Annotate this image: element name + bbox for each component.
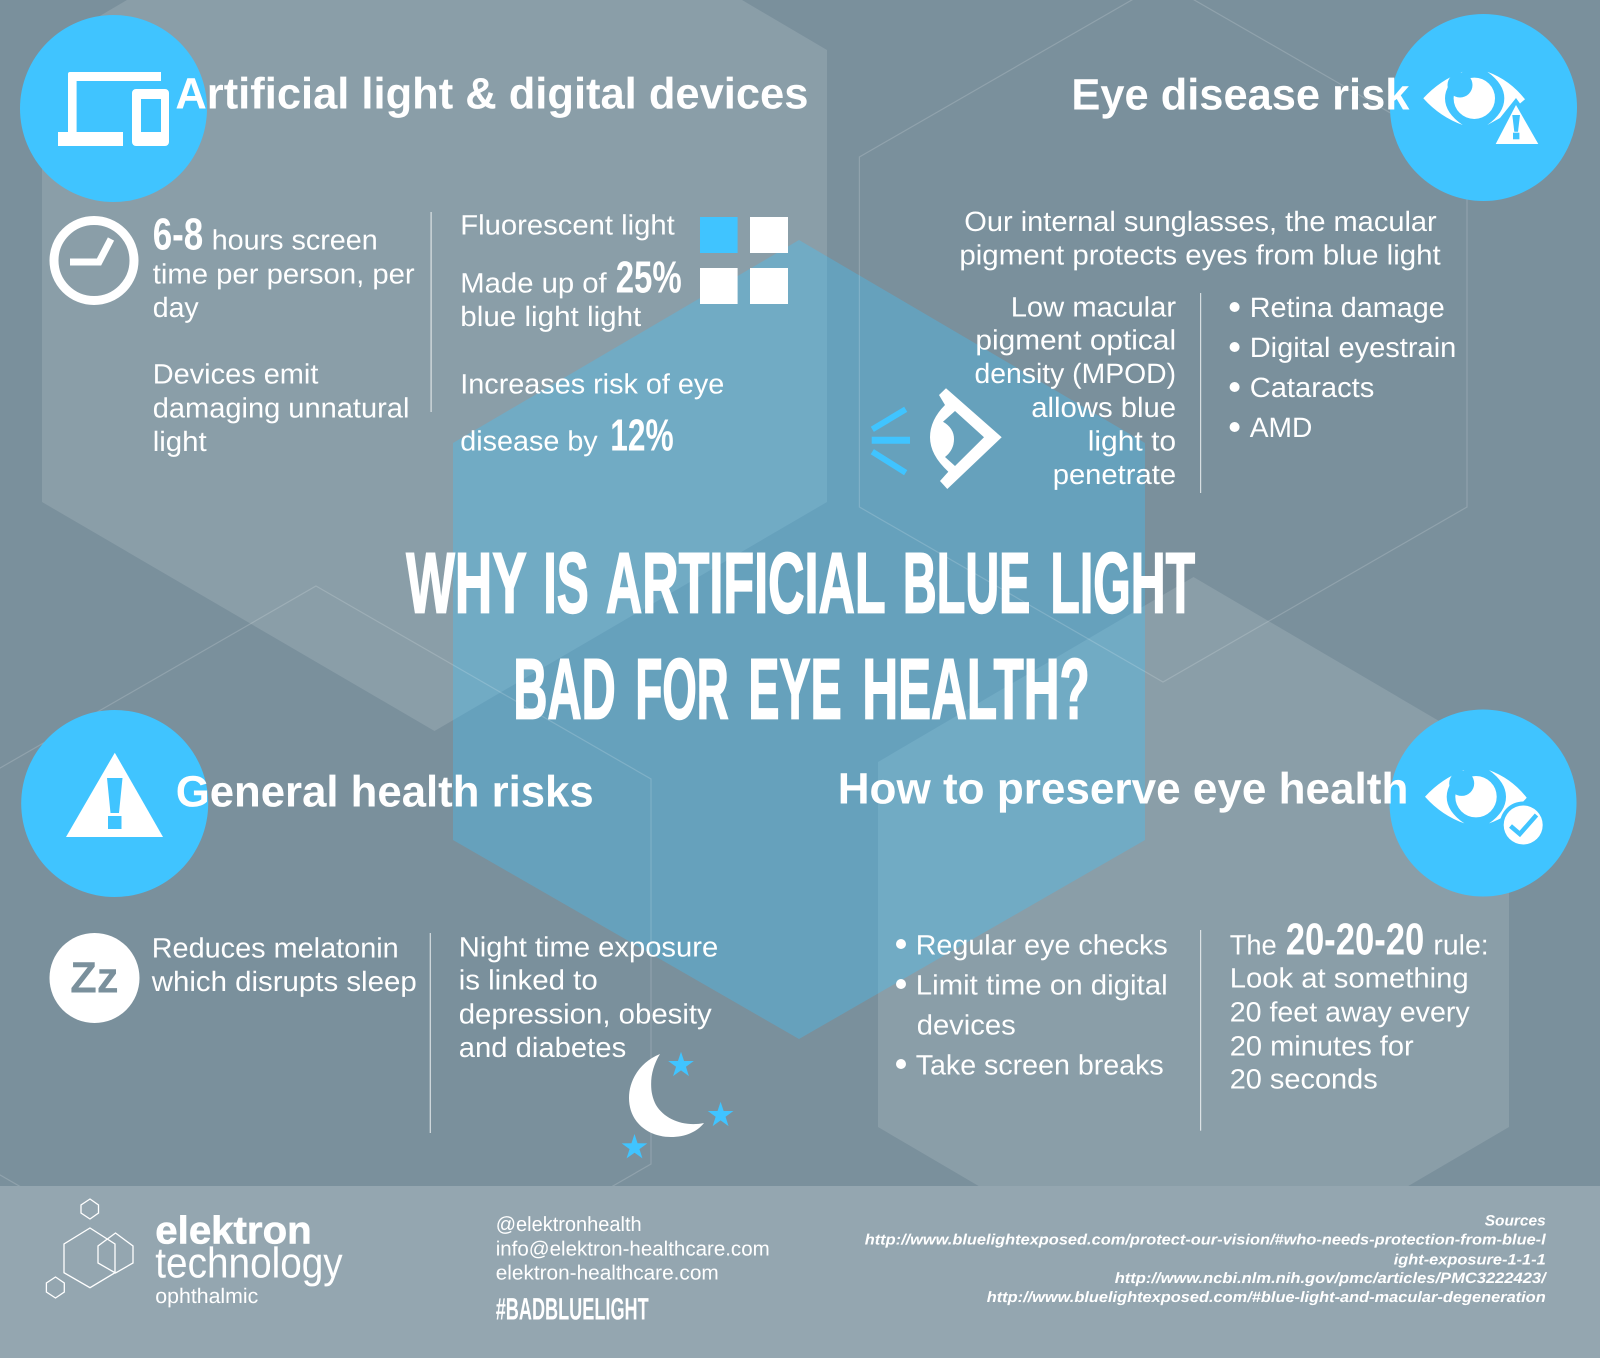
text: 20-20-20 rule: 20 feet away every [1230, 996, 1470, 1027]
text: 20-20-20 rule: 20 seconds [1230, 1064, 1378, 1095]
icon: moon and stars [622, 1052, 733, 1158]
sources: ight-exposure-1-1-1 [1394, 1251, 1546, 1268]
list: eye conditions: Retina damage [1250, 292, 1445, 323]
text: low MPOD: light to [1088, 425, 1176, 456]
text: eye disease risk increase [460, 368, 724, 460]
text: 20-20-20 rule [1230, 913, 1489, 1095]
panel: general health risks [21, 710, 733, 1158]
text: macular pigment intro: pigment protects eyes from blue light [959, 239, 1441, 270]
logo: elektron technology ophthalmic: technology [155, 1239, 343, 1287]
contact details [496, 1213, 770, 1284]
list: eye conditions [1230, 292, 1456, 443]
heading: Artificial light & digital devices [175, 69, 808, 118]
text: 20-20-20 rule: 20 minutes for [1230, 1030, 1414, 1061]
text: eye disease risk increase: 12% [610, 409, 674, 460]
text: fluorescent light: Made up of [460, 267, 607, 298]
text: macular pigment intro: Our internal sunglasses, the macular [964, 206, 1437, 237]
title: FOR [635, 641, 729, 737]
heading: General health risks [176, 767, 594, 816]
text: screen time: time per person, per [153, 258, 415, 289]
footer band [0, 1186, 1600, 1358]
text: screen time: hours screen [212, 224, 378, 255]
icon: sleep Zz [50, 933, 140, 1023]
text: screen time: day [153, 292, 199, 323]
footer [0, 1186, 1600, 1358]
icon: clock [54, 220, 134, 300]
text: devices emit [153, 358, 409, 457]
list: preservation tips: Limit time on digital [916, 970, 1168, 1001]
background hexagon: bottom right [878, 577, 1509, 1312]
list: preservation tips: devices [917, 1010, 1016, 1041]
background hexagon: centre blue [453, 240, 1145, 1039]
list: preservation tips [896, 930, 1168, 1081]
text: low MPOD: pigment optical [975, 325, 1176, 356]
icon: blue rays entering eye [872, 388, 1002, 489]
list: preservation tips: Regular eye checks [916, 930, 1168, 961]
text: macular pigment intro [959, 206, 1441, 270]
text: low MPOD: penetrate [1053, 459, 1176, 490]
title: BAD [513, 641, 616, 737]
text: melatonin: which disrupts sleep [151, 966, 417, 997]
text: low MPOD [974, 291, 1176, 490]
text: night time exposure: and diabetes [459, 1032, 626, 1063]
text: low MPOD: density (MPOD) [974, 358, 1176, 389]
background hexagon: top left [42, 0, 827, 731]
panel: eye disease risk [872, 14, 1577, 493]
text: night time exposure: is linked to [459, 964, 598, 995]
title: BLUE [903, 536, 1030, 632]
text: night time exposure [459, 931, 718, 1063]
icon: eye with warning [1390, 14, 1577, 201]
text: low MPOD: Low macular [1011, 291, 1176, 322]
text: melatonin: Reduces melatonin [152, 932, 399, 963]
sources: Sources [1485, 1212, 1546, 1229]
list: eye conditions: Digital eyestrain [1250, 332, 1456, 363]
text: fluorescent light: blue light light [460, 301, 642, 332]
sources: http://www.bluelightexposed.com/#blue-light-and-macular-degeneration [987, 1289, 1546, 1306]
text: melatonin [151, 932, 417, 997]
text: eye disease risk increase: disease by [460, 425, 598, 456]
text: fluorescent light: 25% [616, 251, 682, 302]
text: 20-20-20 rule: 20-20-20 [1286, 913, 1424, 964]
panel: how to preserve eye health [838, 710, 1576, 1131]
title: IS [543, 536, 589, 632]
text: low MPOD: allows blue [1031, 392, 1176, 423]
text: 20-20-20 rule: The [1230, 930, 1277, 961]
text: 20-20-20 rule: rule: [1433, 930, 1489, 961]
title: EYE [748, 641, 842, 737]
text: fluorescent light: Fluorescent light [460, 209, 675, 240]
hashtag: #BADBLUELIGHT [496, 1291, 649, 1326]
text: 20-20-20 rule: Look at something [1230, 963, 1469, 994]
background hexagon outline: top right [859, 0, 1467, 682]
contact details: info@elektron-healthcare.com [496, 1237, 770, 1260]
title: HEALTH? [862, 641, 1090, 737]
icon: laptop and phone [20, 15, 207, 202]
heading: Eye disease risk [1071, 70, 1410, 119]
list: eye conditions: Cataracts [1250, 372, 1374, 403]
text: screen time: 6-8 [153, 208, 203, 259]
sources [865, 1212, 1548, 1306]
title: WHY [406, 536, 527, 632]
list: preservation tips: Take screen breaks [916, 1050, 1164, 1081]
title [406, 536, 1195, 737]
heading: How to preserve eye health [838, 764, 1408, 813]
text: eye disease risk increase: Increases risk of eye [460, 368, 724, 399]
title: ARTIFICIAL [606, 536, 886, 632]
logo: elektron technology ophthalmic: ophthalmic [155, 1285, 258, 1308]
title: LIGHT [1050, 536, 1195, 632]
icon: warning triangle [21, 710, 208, 897]
contact details: elektron-healthcare.com [496, 1261, 719, 1284]
text: devices emit: light [153, 426, 207, 457]
icon: sleep Zz: Zz [70, 953, 119, 1002]
text: night time exposure: depression, obesity [459, 998, 712, 1029]
icon: quarter blue squares [700, 217, 788, 304]
icon: eye with check [1390, 710, 1576, 896]
sources: http://www.bluelightexposed.com/protect-our-vision/#who-needs-protection-from-blue-l [865, 1231, 1547, 1248]
background hexagon outline: bottom left [0, 586, 651, 1357]
sources: http://www.ncbi.nlm.nih.gov/pmc/articles/PMC3222423/ [1115, 1270, 1548, 1287]
panel: artificial light and digital devices [20, 15, 808, 460]
list: eye conditions: AMD [1250, 412, 1312, 443]
logo: elektron technology ophthalmic [46, 1199, 343, 1308]
text: night time exposure: Night time exposure [459, 931, 718, 962]
text: fluorescent light [460, 209, 682, 332]
logo: elektron technology ophthalmic: elektron [155, 1209, 312, 1252]
text: screen time [153, 208, 415, 323]
text: devices emit: damaging unnatural [153, 392, 409, 423]
text: devices emit: Devices emit [153, 358, 319, 389]
contact details: @elektronhealth [496, 1213, 642, 1236]
